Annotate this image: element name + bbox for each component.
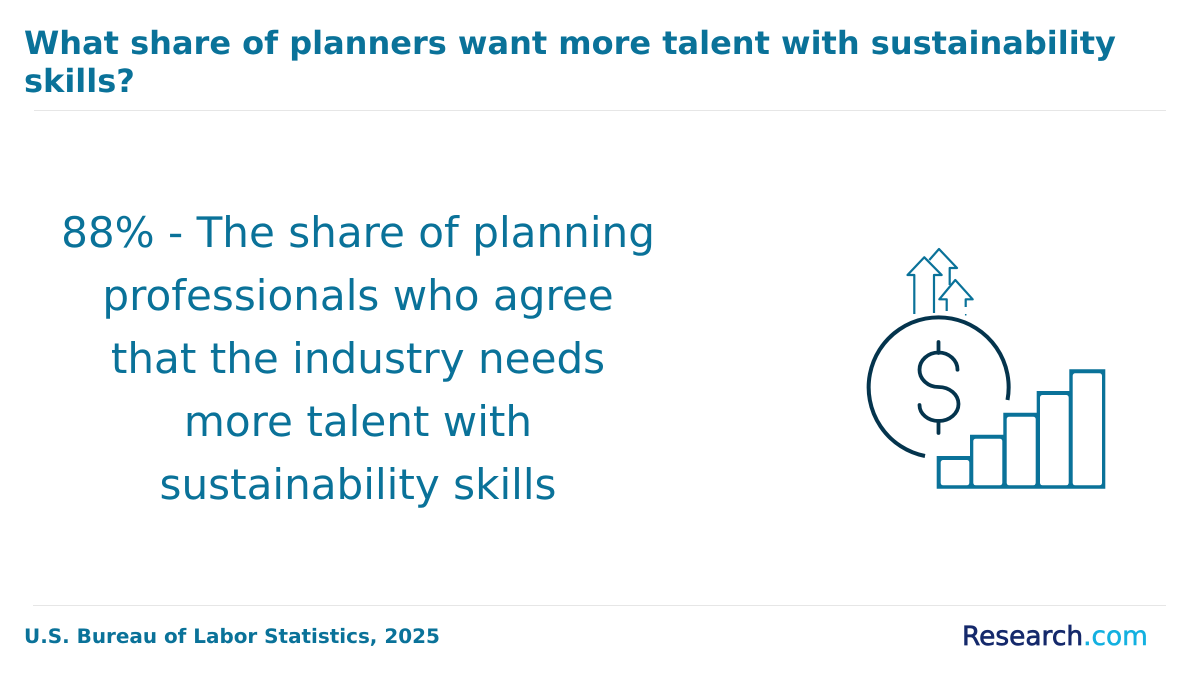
main statistic text: that the industry needs xyxy=(111,334,605,383)
main statistic text: professionals who agree xyxy=(102,271,614,320)
icon: bar chart steps xyxy=(937,369,1105,489)
main statistic text: 88% - The share of planning xyxy=(61,208,655,257)
source: U.S. Bureau of Labor Statistics, 2025 xyxy=(24,624,440,648)
icon: rising arrows xyxy=(908,249,973,316)
icon: coin with rising bars and arrows xyxy=(866,248,1106,489)
icon: dollar coin xyxy=(869,317,1009,456)
main statistic text xyxy=(61,208,655,509)
main statistic text: more talent with xyxy=(184,397,532,446)
main statistic text: sustainability skills xyxy=(160,460,556,509)
title: What share of planners want more talent with sustainability skills? xyxy=(24,24,1116,100)
logo: Research.com: Research.com xyxy=(962,621,1148,652)
